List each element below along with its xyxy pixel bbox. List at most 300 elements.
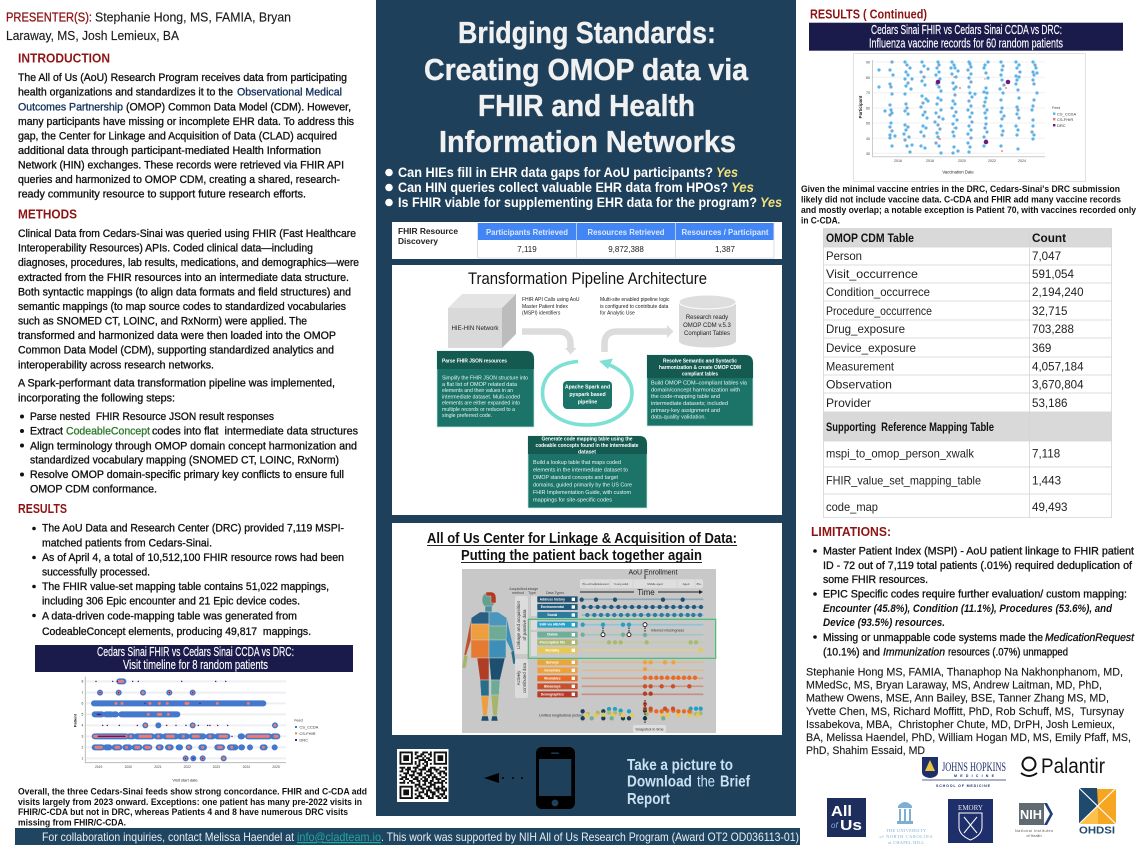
axis labels	[858, 60, 1026, 174]
panel: FHIR resource discovery table: 9,872,388	[608, 245, 644, 254]
axis labels: 2020	[125, 765, 132, 769]
box: parse FHIR JSON: single preferred code.	[442, 413, 492, 419]
panel: FHIR resource discovery table: 7,119	[517, 245, 537, 254]
title: FHIR and Health	[478, 88, 695, 123]
text block: introduction body: additional data through participant-mediated Health Information	[18, 145, 321, 157]
research questions: Is FHIR viable for supplementing EHR data for the program?	[398, 195, 757, 210]
axis labels: 3	[81, 735, 83, 739]
box: resolve harmonization: harmonization & create OMOP CDM	[659, 365, 741, 371]
data type bars: Social	[547, 613, 557, 617]
logo: NIH: NIH	[1020, 807, 1042, 822]
panel: limitations	[811, 524, 1135, 658]
enrollment and time header: Middle aged	[647, 582, 663, 586]
box: generate code mapping table: domains, guided primarily by the US Core	[533, 482, 632, 488]
column labels: method	[512, 591, 524, 595]
heading: limitations: LIMITATIONS:	[811, 524, 891, 539]
note: FHIR API calls	[522, 297, 580, 316]
box: Apache Spark pipeline: pipeline	[578, 400, 597, 406]
list: limitations bullets: Immunization	[883, 646, 945, 658]
box: parse FHIR JSON: elements and their values in an	[442, 388, 513, 394]
heading: methods: METHODS	[18, 206, 77, 222]
list: results bullets: successfully processed.	[42, 567, 150, 579]
text block: methods body: Common Data Model (CDM), supporting standardized analytics and	[18, 345, 334, 357]
panel: results	[18, 501, 344, 638]
box: parse FHIR JSON: intermediate dataset. Multi-coded	[442, 394, 520, 400]
axis labels	[72, 680, 280, 782]
column labels: Type	[528, 591, 536, 595]
legend: DRC	[299, 738, 308, 743]
column labels: Linkage	[526, 587, 538, 591]
text block: introduction body: many participants have missing or incomplete EHR data. To address this	[18, 116, 354, 128]
icon: puzzle body silhouette	[462, 592, 516, 721]
box: generate code mapping table: Generate code mapping table using the	[542, 436, 633, 442]
heading: linkage: All of Us Center for Linkage & Acquisition of Data:	[427, 531, 737, 547]
text block: methods body: incorporating the following steps:	[18, 392, 175, 404]
table: OMOP CDM row counts: 1,443	[1032, 474, 1061, 488]
data type bars: Environmental	[541, 605, 564, 609]
box: parse FHIR JSON: elements are either expanded into	[442, 400, 520, 406]
box: resolve harmonization: compliant tables	[682, 372, 718, 378]
axis labels: 4	[81, 724, 83, 728]
note: multi-site pipeline logic: for Analytic Use	[600, 310, 635, 316]
actively contributed block: contributed data	[522, 662, 527, 693]
box: resolve harmonization: data-quality validation.	[651, 415, 706, 421]
authors	[806, 666, 1131, 757]
axis labels: 40	[866, 137, 870, 141]
arrow: circular pipeline loop	[542, 358, 632, 425]
axis labels: 70	[866, 91, 870, 95]
research questions	[385, 165, 782, 210]
text block: methods body: A Spark-performant data transformation pipeline was implemented,	[18, 378, 335, 390]
arrow: network to pipeline	[522, 332, 576, 354]
text block: methods body: interoperability across research networks.	[18, 359, 214, 371]
box: Apache Spark pipeline	[563, 381, 612, 409]
caption: visit timeline: visits largely from 2023 onward. Exceptions: one patient has many pre-2022 visits in	[18, 797, 362, 808]
logo: All of Us	[827, 798, 866, 837]
table: OMOP CDM row counts: code_map	[826, 501, 878, 514]
box: parse FHIR JSON: a flat list of OMOP related data	[442, 382, 517, 388]
panel: FHIR resource discovery table: Resources Retrieved	[588, 228, 665, 237]
enrollment and time header: Adolescent	[595, 582, 609, 586]
axis labels: 2022	[988, 159, 996, 163]
list: results bullets	[32, 523, 344, 638]
call to action: Download	[627, 774, 692, 791]
title: Creating OMOP data via	[424, 52, 749, 87]
box: generate code mapping table: dataset	[578, 450, 596, 456]
call to action	[627, 757, 751, 808]
icon: OMOP CDM cylinder: Research ready	[686, 315, 728, 321]
caption: vaccine chart: in C-CDA.	[801, 216, 840, 226]
authors: Stephanie Hong MS, FAMIA, Thanaphop Na Nakhonphanom, MD,	[806, 666, 1123, 678]
table: OMOP CDM row counts: OMOP CDM Table	[826, 232, 914, 245]
axis labels: 6	[81, 702, 83, 706]
text block: introduction body: Observational Medical	[237, 87, 342, 99]
data type bars: Claims	[547, 633, 558, 637]
logo: NIH	[1015, 803, 1053, 838]
table: OMOP CDM row counts: 53,186	[1032, 397, 1067, 410]
text block: methods body: transformed and harmonized data were then loaded into the OMOP	[18, 330, 336, 342]
call to action: Report	[627, 791, 670, 808]
list: pipeline steps	[20, 411, 358, 496]
arrow: pipeline to OMOP	[604, 325, 674, 352]
list: pipeline steps: OMOP CDM conformance.	[30, 484, 157, 496]
table: OMOP CDM row counts: 32,715	[1032, 305, 1067, 318]
footer bar: . This work was supported by NIH All of Us Research Program (Award OT2 OD036113-01)	[381, 830, 799, 844]
table: OMOP CDM row counts: 3,670,804	[1032, 378, 1084, 392]
CS_CCDA vaccine dots	[879, 62, 1037, 153]
logo: UNC Chapel Hill: of NORTH CAROLINA	[880, 834, 933, 839]
axis labels: 2	[81, 746, 83, 750]
label: snapshot in time: Snapshot in time	[635, 728, 664, 732]
box: generate code mapping table: codeable concepts found in the intermediate	[536, 443, 639, 449]
text block: methods body: Interoperability Resources) APIs. Coded clinical data—including	[18, 243, 313, 255]
data type bars: Demographics	[541, 692, 564, 696]
table: OMOP CDM row counts: 4,057,184	[1032, 360, 1084, 374]
box: generate code mapping table	[528, 436, 647, 508]
purple DRC visits	[96, 681, 232, 758]
list: pipeline steps: Parse nested FHIR Resource JSON result responses	[30, 411, 274, 423]
presenters: PRESENTER(S):	[6, 10, 92, 24]
table: OMOP CDM row counts: Device_exposure	[826, 342, 916, 355]
list: results bullets: The AoU Data and Research Center (DRC) provided 7,119 MSPI-	[42, 523, 344, 535]
table: OMOP CDM row counts: Supporting Reference Mapping Table	[826, 421, 994, 434]
list: pipeline steps: standardized vocabulary mapping (SNOMED CT, LOINC, RxNorm)	[30, 455, 339, 467]
title: Bridging Standards:	[458, 15, 716, 50]
logo: NIH: of Health	[1026, 834, 1042, 838]
text block: introduction body: queries and harmonized to OMOP CDM, creating a shared, research-	[18, 174, 340, 186]
list: results bullets: As of April 4, a total of 10,512,100 FHIR resource rows had been	[42, 552, 344, 564]
logo: Johns Hopkins: JOHNS HOPKINS	[942, 759, 1006, 774]
title: Information Networks	[439, 124, 736, 159]
footer bar: For collaboration inquiries, contact Melissa Haendel at	[42, 830, 295, 844]
logo: All of Us: Us	[840, 817, 862, 834]
table: OMOP CDM row counts: 7,118	[1032, 448, 1060, 460]
note: multi-site pipeline logic: is configured to contribute data	[600, 304, 669, 310]
data type bars: Bioassays	[544, 684, 561, 688]
axis labels: 50	[866, 122, 870, 126]
chart: influenza vaccine records	[854, 54, 1086, 182]
note: multi-site pipeline logic: Multi-site enabled pipeline logic	[600, 297, 670, 303]
note: FHIR API calls: (MSPI) identifiers	[522, 310, 561, 316]
text block: introduction body: (OMOP) Common Data Model (CDM). However,	[126, 101, 351, 113]
axis labels: Visit start date	[172, 777, 198, 782]
box: resolve harmonization: primary-key assignment and	[651, 408, 720, 414]
text block: introduction body: Network (HIN) exchanges. These records were retrieved via FHIR API	[18, 160, 344, 172]
list: results bullets: matched patients from Cedars-Sinai.	[42, 537, 212, 549]
axis labels: 2023	[213, 765, 220, 769]
logo: UNC Chapel Hill	[880, 802, 933, 845]
panel: center column background	[376, 0, 796, 816]
heading: introduction: INTRODUCTION	[18, 50, 110, 66]
authors: Issabekova, MBA, Christopher Chute, MD, DrPH, Josh Lemieux,	[806, 719, 1115, 731]
table: OMOP CDM row counts: 703,288	[1032, 323, 1074, 336]
list: limitations bullets: Device (93.5%) resources.	[823, 617, 945, 629]
legend: CS-FHIR	[1057, 117, 1073, 122]
note: multi-site pipeline logic	[600, 297, 670, 316]
passive data block: Linkage and acquisition	[516, 601, 521, 649]
axis labels: Patient	[72, 713, 77, 727]
list: limitations bullets: Missing or unmappable code systems made the	[823, 632, 1043, 644]
column labels	[509, 587, 564, 595]
logo: Johns Hopkins: MEDICINE	[954, 774, 995, 778]
box: generate code mapping table: Build a lookup table that maps coded	[533, 460, 621, 466]
axis labels: 2016	[894, 159, 902, 163]
data type bars: EHR via HIE/HIN	[539, 623, 566, 627]
banner: visit timeline: Visit timeline for 8 random patients	[123, 657, 268, 672]
table: OMOP CDM row counts: Count	[1032, 232, 1066, 245]
text block: methods body: Clinical Data from Cedars-Sinai was queried using FHIR (Fast Healthcare	[18, 228, 356, 240]
panel: transformation pipeline architecture	[392, 265, 782, 515]
QR code	[397, 749, 448, 802]
icon: OMOP CDM cylinder: Compliant Tables	[684, 331, 730, 337]
label: snapshot in time	[633, 725, 666, 733]
passive data block	[515, 596, 528, 654]
box: resolve harmonization: domain/concept harmonization with	[651, 387, 740, 393]
table: OMOP CDM row counts: 369	[1032, 342, 1051, 355]
banner: influenza vaccine	[809, 22, 1123, 51]
table: OMOP CDM row counts: 591,054	[1032, 268, 1074, 281]
note: FHIR API calls: FHIR API Calls using AoU	[522, 297, 580, 303]
list: results bullets: A data-driven code-mapping table was generated from	[42, 610, 297, 622]
legend	[1052, 106, 1076, 128]
data type bars: Surveys	[546, 660, 559, 664]
text block: methods body: semantic mappings (to map source codes to standardized vocabularies	[18, 301, 346, 313]
axis labels: 2021	[154, 765, 162, 769]
table: OMOP CDM row counts: Person	[826, 250, 862, 263]
enrollment and time header: Pre-school	[582, 582, 596, 586]
authors: Mathew Owens, MSE, Ann Bailey, BSE, Tanner Zhang MS, MD,	[806, 693, 1109, 705]
call to action: the	[697, 774, 715, 791]
panel: FHIR resource discovery table: 1,387	[715, 245, 736, 254]
table: OMOP CDM row counts: FHIR_value_set_mapping_table	[826, 474, 981, 488]
table: OMOP CDM row counts: Condition_occurrece	[826, 286, 930, 299]
legend: DRC	[1057, 123, 1066, 128]
box: resolve harmonization: the code-mapping table and	[651, 394, 720, 400]
axis labels: 80	[866, 76, 870, 80]
table: OMOP CDM row counts: Visit_occurrence	[826, 268, 918, 281]
icon: HIE-HIN network cube: HIE-HIN Network	[452, 325, 499, 332]
panel: FHIR resource discovery table: Participants Retrieved	[486, 228, 568, 237]
table: OMOP CDM row counts: Provider	[826, 397, 871, 410]
text block: introduction body: gap, the Center for Linkage and Acquisition of Data (CLAD) acquired	[18, 130, 337, 142]
column labels: Acquisition	[509, 587, 527, 591]
logo: OHDSI	[1079, 788, 1116, 836]
axis labels: 2022	[184, 765, 191, 769]
axis labels: 90	[866, 60, 870, 64]
note: FHIR API calls: Master Patient Index	[522, 304, 568, 310]
legend: Feed	[1052, 106, 1060, 110]
table: OMOP CDM row counts	[823, 228, 1112, 518]
box: generate code mapping table: OMOP standard concepts and target	[533, 475, 618, 481]
legend: CS_CCDA	[299, 725, 319, 730]
data type bars	[537, 596, 703, 724]
heading: pipeline: Transformation Pipeline Architecture	[468, 269, 707, 288]
icon: OMOP CDM cylinder	[679, 295, 736, 348]
logo: NIH: National Institutes	[1015, 829, 1053, 833]
arrow: phone to QR	[484, 773, 523, 783]
box: generate code mapping table: FHIR Implementation Guide, with custom	[533, 490, 631, 496]
blue CS_CCDA visits	[94, 681, 277, 758]
research questions: Can HIEs fill in EHR data gaps for AoU participants?	[398, 165, 713, 180]
DRC vaccine dots	[938, 82, 1008, 142]
table: OMOP CDM row counts: Drug_exposure	[826, 323, 905, 336]
authors: BA, Melissa Haendel, PhD, William Hogan MD, MS, Emily Pfaff, MS,	[806, 732, 1131, 744]
enrollment and time header: Aged	[683, 582, 690, 586]
call to action: Take a picture to	[627, 757, 733, 774]
icon: OMOP CDM cylinder: OMOP CDM v.5.3	[683, 323, 732, 329]
chart: visit timeline for 8 patients	[72, 677, 319, 782]
legend: CS-FHIR	[299, 731, 316, 736]
list: limitations bullets	[813, 546, 1135, 658]
box: resolve harmonization: Build OMOP CDM–compliant tables via	[651, 380, 747, 386]
authors: PhD, Shahim Essaid, MD	[806, 745, 925, 757]
axis labels: Participant	[858, 95, 863, 118]
CS-FHIR vaccine dots	[890, 62, 1035, 143]
list: limitations bullets: (10.1%) and	[823, 646, 880, 658]
caption: vaccine chart	[801, 184, 1137, 226]
icon: HIE-HIN network cube	[448, 294, 516, 348]
logo: Emory: EMORY	[958, 804, 983, 812]
panel: FHIR resource discovery table: Discovery	[398, 237, 439, 246]
research questions: Yes	[716, 165, 738, 180]
table: OMOP CDM row counts: 7,047	[1032, 250, 1061, 263]
event dots	[582, 600, 701, 718]
research questions: Can HIN queries collect valuable EHR data from HPOs?	[398, 180, 728, 195]
passive data block: of passive data	[522, 609, 527, 640]
logo: Emory	[948, 799, 993, 843]
logo: All of Us: All	[831, 803, 852, 820]
title	[424, 15, 749, 159]
box: generate code mapping table: mappings for site-specific codes	[533, 498, 612, 504]
heading: results: RESULTS	[18, 501, 67, 516]
caption: visit timeline: FHIR/C-CDA but not in DRC, whereas Patients 4 and 8 have numerous DRC visits	[18, 807, 348, 818]
axis labels: 2024	[243, 765, 250, 769]
box: resolve harmonization: Resolve Semantic and Syntactic	[663, 358, 737, 364]
box: parse FHIR JSON: Simplify the FHIR JSON structure into	[442, 376, 528, 382]
logo: UNC Chapel Hill: THE UNIVERSITY	[886, 828, 927, 833]
text block: introduction body: The All of Us (AoU) Research Program receives data from participating	[18, 72, 347, 84]
caption: visit timeline: Overall, the three Cedars-Sinai feeds show strong concordance. FHIR and C-CDA add	[18, 786, 367, 798]
axis labels: 7	[81, 691, 83, 695]
text block: methods body: such as SNOMED CT, LOINC, and RxNorm) were applied. The	[18, 316, 307, 328]
axis labels: 5	[81, 713, 83, 717]
enrollment and time header: 80+	[697, 582, 702, 586]
enrollment and time header: Time	[637, 588, 655, 597]
list: limitations bullets: EPIC Specific codes require further evaluation/ custom mapping:	[823, 588, 1127, 600]
footer bar	[15, 828, 800, 845]
list: limitations bullets: resources (.07%) unmapped	[948, 646, 1068, 658]
actively contributed block: Actively	[516, 670, 521, 685]
heading: linkage: Putting the patient back together again	[461, 548, 702, 564]
axis labels: Vaccination Date	[942, 170, 974, 174]
panel: patient linkage figure	[392, 523, 782, 735]
box: resolve harmonization: intermediate datasets; included	[651, 401, 728, 407]
axis labels: 2024	[1018, 159, 1026, 163]
enrollment and time header: Young adult	[614, 582, 629, 586]
label: unified longitudinal picture: Unified longitudinal picture	[539, 714, 584, 718]
box: Apache Spark pipeline: Apache Spark and	[565, 384, 610, 390]
table: OMOP CDM row counts: mspi_to_omop_person_xwalk	[826, 448, 974, 460]
axis labels: 2025	[272, 765, 280, 769]
enrollment and time header	[580, 570, 703, 597]
list: limitations bullets: some FHIR resources.	[823, 574, 928, 586]
list: limitations bullets: MedicationRequest	[1045, 632, 1135, 644]
list: pipeline steps: codes into flat intermediate data structures	[152, 426, 358, 438]
box: parse FHIR JSON: multiple records or reduced to a	[442, 407, 515, 413]
box: parse FHIR JSON: Parse FHIR JSON resources	[442, 358, 507, 364]
logo: Palantir: Palantir	[1041, 755, 1105, 778]
table: OMOP CDM row counts: Observation	[826, 378, 892, 392]
figure: longitudinal data types	[462, 569, 716, 733]
footer bar: info@cladteam.io	[297, 830, 381, 844]
panel: FHIR resource discovery table: Resources / Participant	[682, 228, 769, 237]
heading: results continued: RESULTS ( Continued)	[810, 6, 927, 22]
presenters: Laraway, MS, Josh Lemieux, BA	[6, 28, 179, 43]
call to action: Brief	[720, 774, 751, 791]
text block: methods body: diagnoses, procedures, lab results, medications, and demographics—were	[18, 257, 359, 269]
panel: FHIR resource discovery table	[392, 222, 782, 259]
logo: All of Us: of	[831, 821, 838, 830]
logo: OHDSI: OHDSI	[1079, 826, 1115, 836]
panel: FHIR resource discovery table: FHIR Resource	[398, 227, 459, 236]
logo: Johns Hopkins: SCHOOL OF MEDICINE	[936, 784, 991, 788]
axis labels: 60	[866, 106, 870, 110]
axis labels: 2018	[926, 159, 934, 163]
box: resolve harmonization	[647, 355, 753, 426]
list: pipeline steps: Resolve OMOP domain-specific primary key conflicts to ensure full	[30, 469, 344, 481]
box: parse FHIR JSON	[437, 351, 534, 427]
authors: MMedSc, MS, Bryan Laraway, MS, Andrew Laitman, MD, PhD,	[806, 680, 1102, 692]
legend: Feed	[294, 719, 303, 723]
text block: introduction body: health organizations and standardizes it to the	[18, 87, 233, 99]
panel: introduction	[18, 50, 354, 201]
list: results bullets: The FHIR value-set mapping table contains 51,022 mappings,	[42, 581, 329, 593]
data type bars: Prescription fits	[540, 640, 565, 644]
table: OMOP CDM row counts: Procedure_occurrence	[826, 305, 932, 318]
enrollment and time header: AoU Enrollment	[628, 570, 678, 576]
heading: linkage	[427, 531, 737, 564]
table: OMOP CDM row counts: 2,194,240	[1032, 286, 1084, 299]
box: Apache Spark pipeline: pyspark based	[569, 392, 606, 398]
column labels: Data Types	[546, 591, 564, 595]
list: pipeline steps: Align terminology through OMOP domain concept harmonization and	[30, 440, 357, 452]
caption: visit timeline: missing from FHIR/C-CDA.	[18, 818, 126, 828]
text block: methods body	[18, 228, 359, 404]
axis labels: 2020	[958, 159, 966, 163]
text block: introduction body: Outcomes Partnership	[18, 101, 123, 113]
red CS-FHIR visits	[95, 681, 277, 758]
legend	[294, 719, 319, 743]
legend: CS_CCDA	[1057, 112, 1076, 116]
axis labels: 30	[866, 152, 870, 156]
authors: Yvette Chen, MS, Richard Moffitt, PhD, Rob Schuff, MS, Tursynay	[806, 706, 1124, 718]
axis labels: 2019	[95, 765, 103, 769]
text block: methods body: Both syntactic mappings (to align data formats and field structures) and	[18, 286, 351, 298]
box: generate code mapping table: elements in the intermediate dataset to	[533, 468, 628, 474]
list: results bullets: CodeableConcept elements, producing 49,817 mappings.	[42, 626, 311, 638]
presenters	[6, 10, 291, 43]
data type bars: Address history	[540, 597, 565, 601]
figure: longitudinal data types: Inferred missingness	[651, 628, 684, 632]
logo: Johns Hopkins	[922, 757, 1006, 788]
list: pipeline steps: CodeableConcept	[66, 426, 150, 438]
presenters: Stephanie Hong, MS, FAMIA, Bryan	[95, 10, 291, 24]
logo: UNC Chapel Hill: at CHAPEL HILL	[888, 840, 924, 845]
text block: introduction body: ready community resource to support future research efforts.	[18, 189, 306, 201]
table: OMOP CDM row counts: Measurement	[826, 360, 895, 374]
caption: visit timeline	[18, 786, 367, 828]
icon: smartphone	[536, 747, 575, 809]
